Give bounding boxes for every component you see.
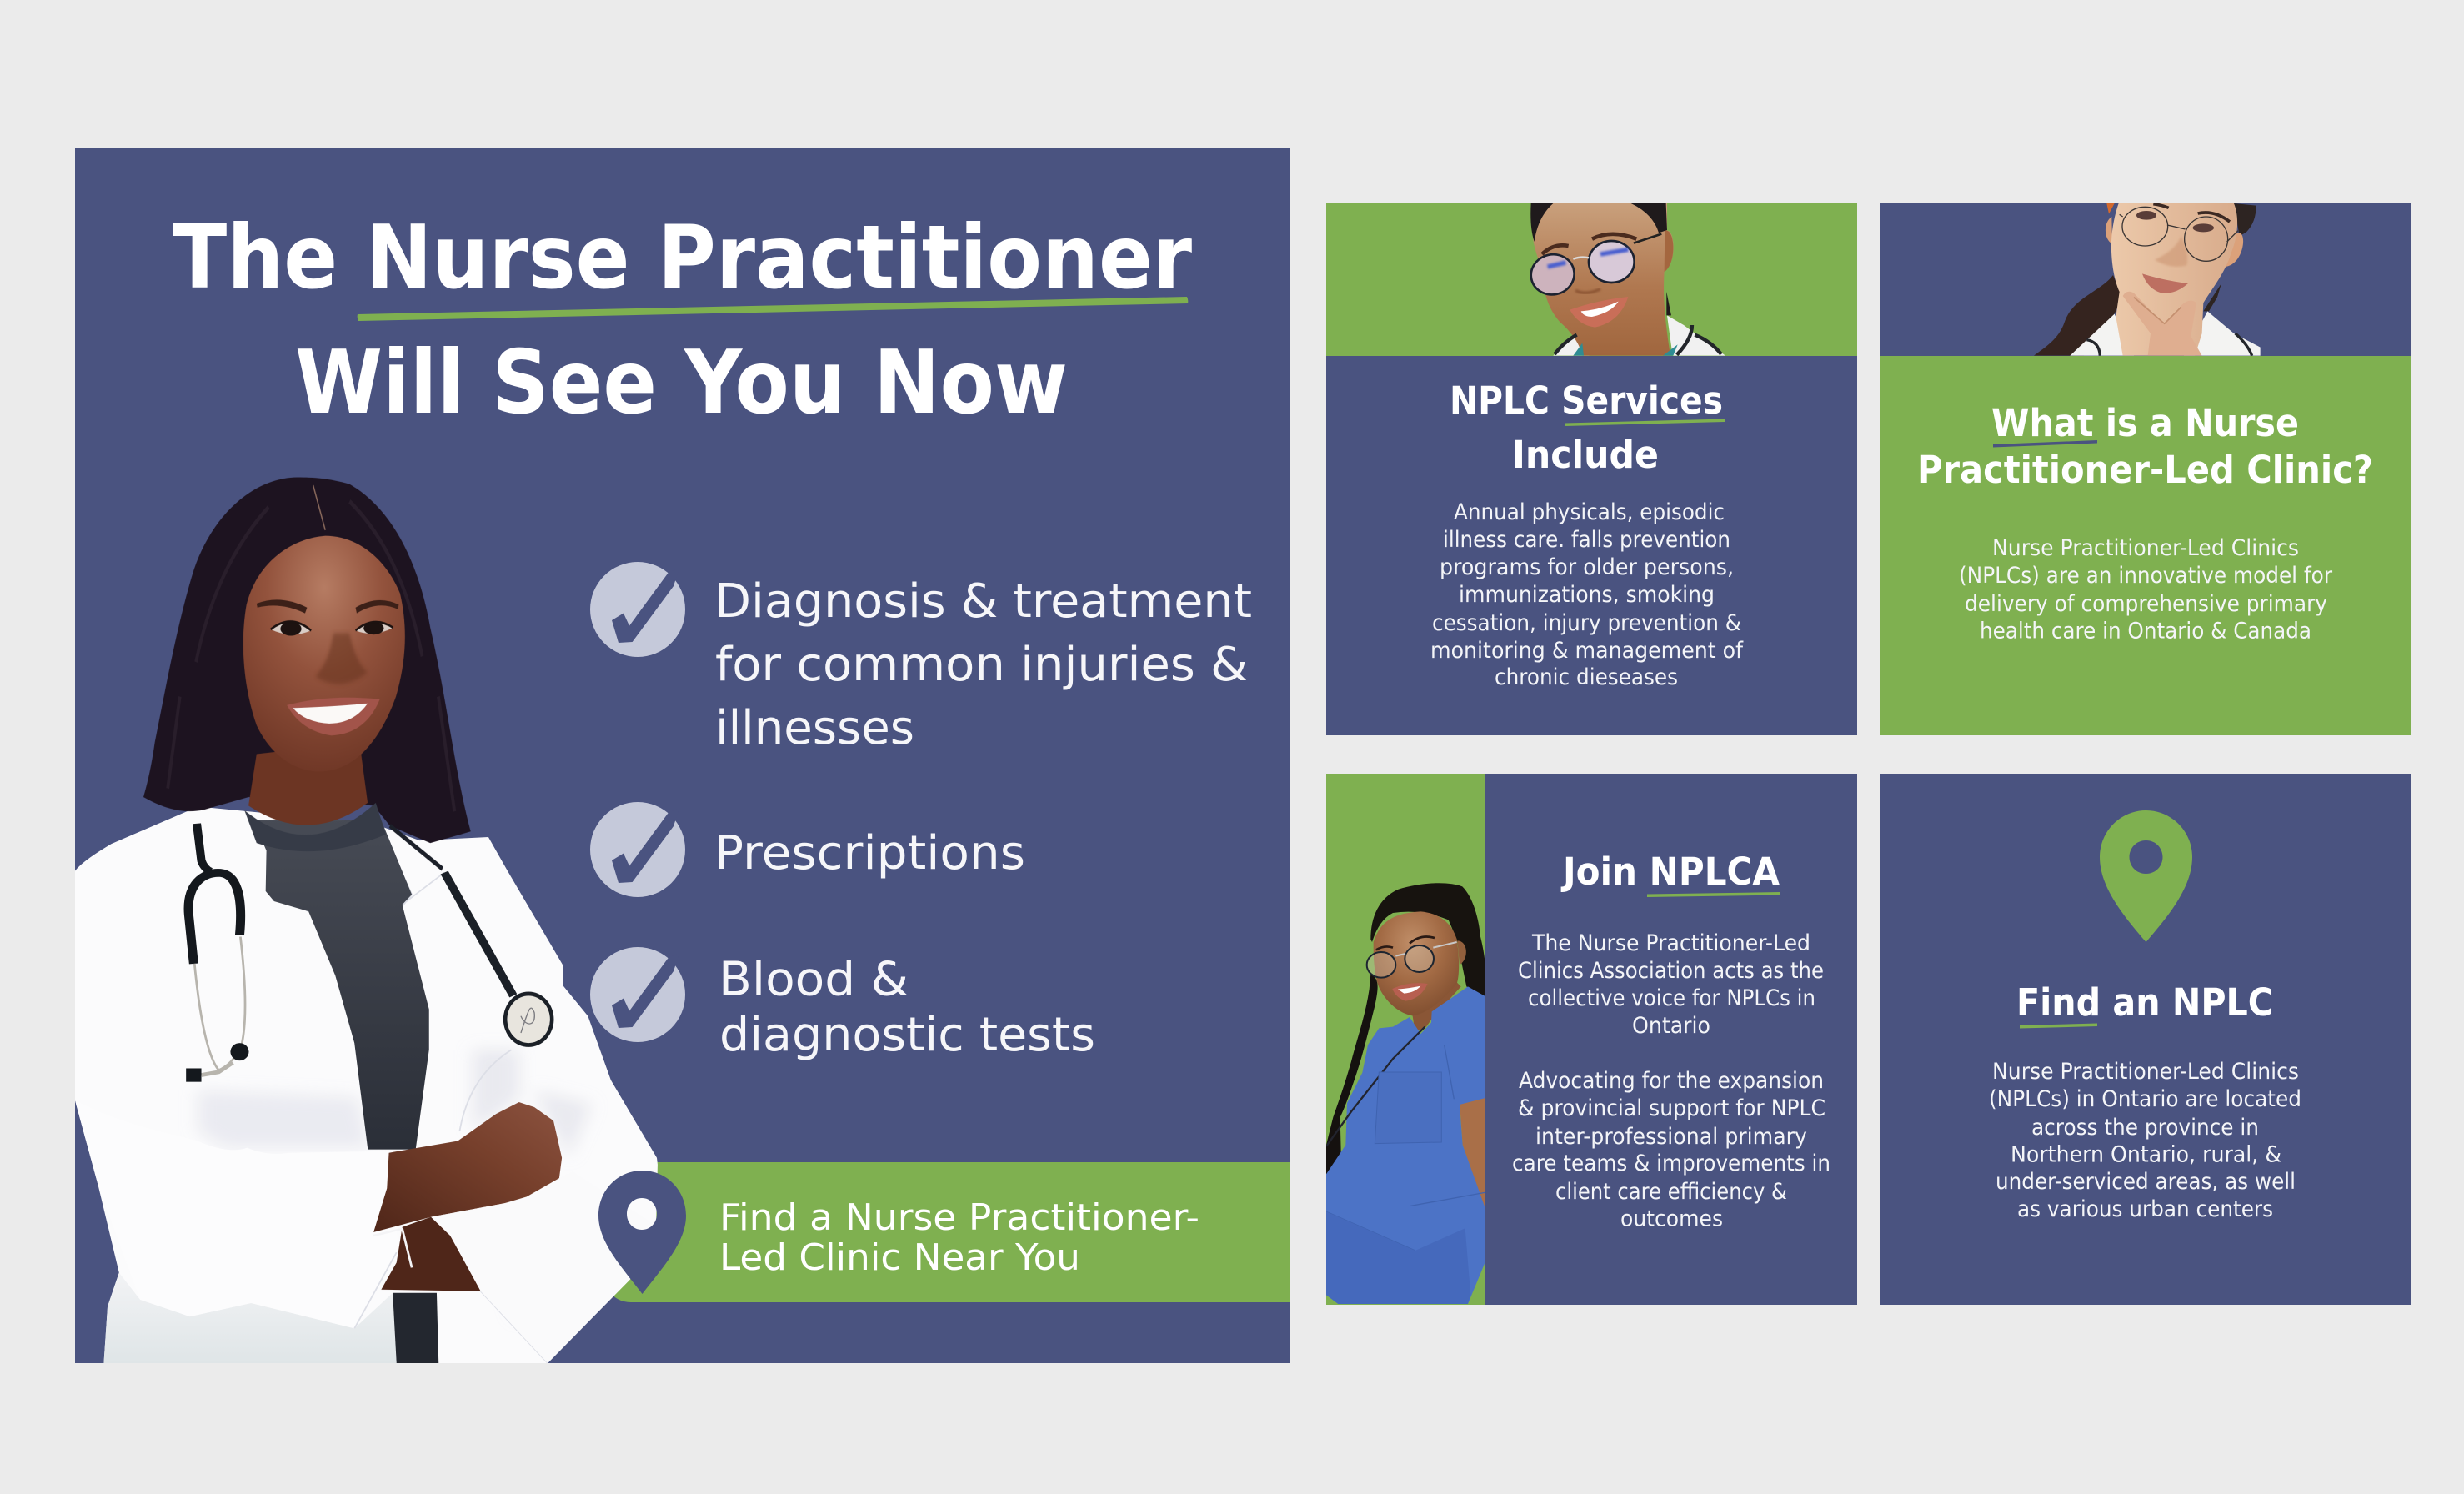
glasses — [1367, 942, 1457, 978]
body text: Ontario — [1632, 1013, 1710, 1039]
call-to-action bar — [583, 1162, 1290, 1302]
hand — [2123, 292, 2202, 356]
round glasses — [2120, 207, 2238, 261]
check item: blood and diagnostic tests: Blood & — [719, 952, 909, 1007]
body text: (NPLCs) in Ontario are located — [1989, 1086, 2301, 1112]
lower coat panel — [103, 1272, 397, 1363]
heading underline — [1647, 892, 1780, 897]
nose shadow — [2155, 236, 2187, 267]
body text: chronic dieseases — [1495, 664, 1678, 690]
smile — [1392, 983, 1428, 1001]
heading underline — [1565, 419, 1725, 426]
panel: NPLC services — [1326, 203, 1857, 735]
ear — [1457, 940, 1466, 965]
ponytail — [2034, 275, 2121, 356]
check item: prescriptions — [590, 802, 1025, 897]
body text: cessation, injury prevention & — [1432, 610, 1741, 636]
body text: (NPLCs) are an innovative model for — [1959, 563, 2333, 589]
heading: Practitioner-Led Clinic? — [1917, 448, 2373, 492]
body text: immunizations, smoking — [1459, 582, 1715, 608]
hair — [143, 477, 471, 843]
body text: The Nurse Practitioner-Led — [1531, 930, 1810, 956]
body text: health care in Ontario & Canada — [1980, 619, 2311, 644]
title — [173, 207, 1192, 434]
mouth — [1570, 297, 1628, 328]
heading underline — [2020, 1024, 2097, 1029]
body text: under-serviced areas, as well — [1996, 1169, 2296, 1195]
neck — [1412, 981, 1461, 1032]
photo: smiling nurse practitioner in white coat — [75, 477, 658, 1363]
pants shading — [1326, 1211, 1470, 1304]
hair — [1370, 883, 1487, 998]
photo: thinking nurse with round glasses — [2034, 203, 2261, 356]
body text: care teams & improvements in — [1512, 1151, 1830, 1176]
coat shading — [197, 1049, 588, 1148]
panel: main poster — [75, 148, 1290, 1363]
body text — [1959, 535, 2333, 644]
right sleeve edge — [431, 1171, 656, 1363]
check item: diagnosis and treatment: illnesses — [715, 701, 914, 755]
pocket — [1375, 1072, 1441, 1144]
body text: client care efficiency & — [1555, 1179, 1787, 1205]
upper forearm and fist — [373, 1102, 562, 1232]
lower shirt — [393, 1293, 438, 1363]
chin shadow — [2134, 298, 2181, 323]
check item: prescriptions: Prescriptions — [714, 826, 1025, 880]
call-to-action text — [719, 1196, 1199, 1279]
coat — [1553, 315, 1725, 356]
chest piece — [503, 992, 553, 1047]
stethoscope — [1555, 325, 1721, 355]
stethoscope — [2086, 333, 2252, 356]
glasses — [1527, 234, 1661, 298]
panel: join NPLCA — [1326, 774, 1857, 1305]
check item: blood and diagnostic tests — [590, 947, 1095, 1062]
cuff with thread — [402, 1227, 413, 1268]
orange hair accent — [2106, 203, 2115, 214]
scrubs — [1326, 986, 1487, 1304]
heading: Join NPLCA — [1560, 850, 1780, 894]
right stethoscope tube by the neck — [390, 825, 443, 869]
stethoscope — [188, 824, 513, 1075]
body text: delivery of comprehensive primary — [1965, 591, 2327, 617]
ears — [2106, 217, 2243, 267]
body text: Nurse Practitioner-Led Clinics — [1992, 1059, 2299, 1085]
heading — [1450, 379, 1723, 477]
photo: nurse with dark rimmed glasses — [1527, 203, 1725, 356]
heading: Find an NPLC — [2016, 980, 2273, 1025]
sleeve seam — [1326, 1045, 1487, 1251]
body text: inter-professional primary — [1535, 1124, 1807, 1150]
body text: Nurse Practitioner-Led Clinics — [1992, 535, 2299, 561]
body text: Northern Ontario, rural, & — [2011, 1142, 2281, 1167]
white coat — [75, 807, 658, 1363]
body text — [1512, 930, 1830, 1232]
body text: across the province in — [2031, 1115, 2259, 1141]
body text — [1430, 499, 1744, 690]
body text: Advocating for the expansion — [1519, 1068, 1824, 1094]
lips — [2142, 273, 2188, 293]
panel: what is a nurse practitioner-led clinic — [1880, 203, 2411, 735]
panel: find an NPLC — [1880, 774, 2411, 1305]
left braid — [1326, 974, 1378, 1174]
ear — [1665, 230, 1673, 272]
call-to-action text: Led Clinic Near You — [719, 1236, 1080, 1279]
title: Will See You Now — [295, 332, 1068, 434]
body text: Annual physicals, episodic — [1454, 499, 1725, 525]
sleeve and lapel folds — [75, 1100, 252, 1186]
eyes and brows — [2136, 204, 2230, 232]
face — [243, 536, 405, 771]
white shirt — [2070, 311, 2261, 356]
body text: & provincial support for NPLC — [1518, 1095, 1825, 1121]
facial features — [257, 599, 398, 735]
body text — [1989, 1059, 2301, 1222]
lower forearm — [381, 1217, 481, 1291]
body text: as various urban centers — [2017, 1196, 2273, 1222]
check item: blood and diagnostic tests: diagnostic tests — [719, 1008, 1095, 1062]
heading: What is a Nurse — [1991, 401, 2299, 445]
heading — [1917, 401, 2373, 492]
title underline — [358, 297, 1188, 321]
hair highlights — [168, 501, 454, 811]
head and hair — [143, 477, 471, 869]
brows — [1376, 936, 1435, 950]
heading: NPLC Services — [1450, 379, 1723, 423]
hair parting — [313, 485, 325, 530]
heading: Include — [1512, 433, 1659, 477]
coat, arms and stethoscope — [75, 807, 658, 1363]
call-to-action text: Find a Nurse Practitioner- — [719, 1196, 1199, 1239]
body text: Clinics Association acts as the — [1518, 958, 1824, 984]
dark shirt — [253, 820, 429, 1150]
check item: diagnosis and treatment: for common injuries & — [715, 638, 1248, 692]
lanyard — [1326, 1027, 1425, 1146]
infographic canvas — [75, 148, 2411, 1363]
body text: outcomes — [1620, 1206, 1723, 1232]
face — [1374, 911, 1459, 1015]
body text: collective voice for NPLCs in — [1528, 985, 1815, 1011]
body text: monitoring & management of — [1430, 638, 1744, 664]
face and neck — [1533, 203, 1674, 356]
arm — [1460, 1095, 1487, 1215]
teal top — [1573, 343, 1678, 356]
nose shadow — [1575, 289, 1600, 293]
stethoscope ends — [230, 1043, 248, 1060]
face and neck — [2111, 203, 2237, 356]
hair top right — [2203, 203, 2256, 311]
heading underline — [1993, 440, 2097, 447]
collar — [244, 803, 386, 851]
title: The Nurse Practitioner — [173, 207, 1192, 308]
icon: location pin navy — [598, 1171, 686, 1294]
brows — [1542, 234, 1636, 254]
check item: diagnosis and treatment: Diagnosis & treatment — [714, 574, 1252, 629]
check item: diagnosis and treatment — [590, 562, 1252, 755]
photo: nurse in blue scrubs — [1326, 883, 1487, 1304]
body text: programs for older persons, — [1440, 554, 1734, 580]
icon: location pin green — [2100, 810, 2192, 942]
hair — [1530, 203, 1671, 315]
body text: illness care. falls prevention — [1443, 527, 1730, 553]
neck — [248, 752, 368, 825]
